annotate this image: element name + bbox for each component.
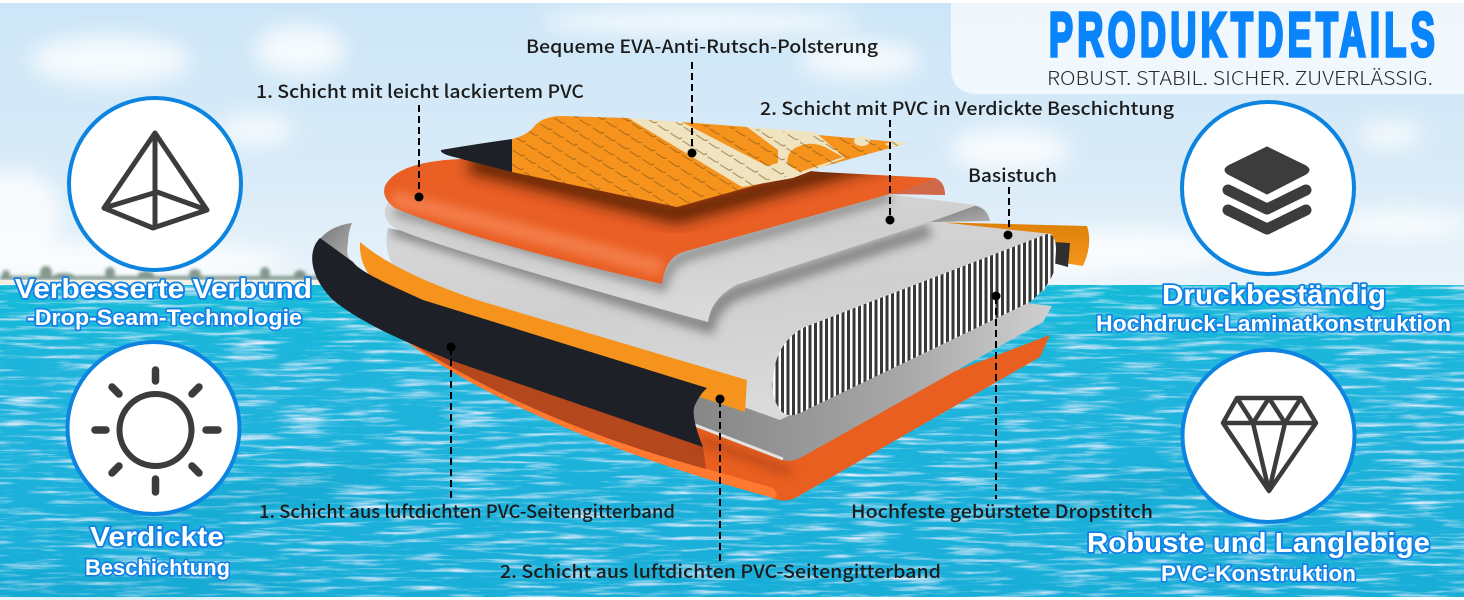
inner grey of black band	[319, 223, 353, 262]
leader: base cloth	[1004, 187, 1012, 240]
subheading: -Drop-Seam-Technologie	[27, 305, 302, 330]
pad tread texture	[512, 116, 908, 207]
leader: side band 2	[716, 394, 724, 562]
leader: layer 2 PVC	[886, 120, 894, 224]
pad orange patches	[682, 122, 843, 172]
label: layer 1 PVC: 1. Schicht mit leicht lackiertem PVC	[256, 78, 584, 104]
board cross-section illustration	[312, 116, 1089, 500]
pad orange	[512, 116, 908, 207]
dropstitch stripes	[773, 234, 1056, 415]
feature: thick coating	[68, 342, 240, 580]
sand strip	[0, 280, 320, 284]
label: EVA padding: Bequeme EVA-Anti-Rutsch-Polsterung	[526, 33, 879, 59]
icon: pyramid	[69, 98, 241, 270]
label: base cloth: Basistuch	[968, 162, 1057, 188]
black valve block	[1053, 242, 1070, 267]
water ripples	[0, 285, 1464, 597]
EVA pad	[441, 116, 908, 207]
top orange layer	[384, 150, 945, 284]
subheading: Beschichtung	[85, 555, 230, 580]
leader: dropstitch	[992, 292, 1000, 499]
header panel	[951, 3, 1464, 94]
darker wave swaths	[0, 449, 1330, 595]
title: PRODUKTDETAILS	[1049, 0, 1435, 69]
leader: EVA padding	[688, 62, 696, 158]
lower grey layer	[690, 300, 1052, 461]
heading: Druckbeständig	[1162, 279, 1386, 310]
tree line on the horizon	[0, 266, 320, 280]
heading: Verdickte	[90, 521, 224, 552]
feature: seam technology	[15, 98, 312, 330]
bottom orange layer	[405, 335, 1050, 500]
clouds	[0, 10, 1464, 282]
icon: diamond	[1182, 350, 1354, 522]
upper silver sheet	[385, 193, 990, 322]
label: side band 2: 2. Schicht aus luftdichten PVC-Seitengitterband	[500, 558, 941, 584]
heading: Robuste und Langlebige	[1087, 527, 1430, 558]
curled sheet edge	[930, 206, 990, 222]
subtitle: ROBUST. STABIL. SICHER. ZUVERLÄSSIG.	[1047, 64, 1433, 91]
pad cream patches	[628, 118, 908, 187]
feature: durable construction	[1087, 350, 1430, 586]
icon: sun	[68, 342, 240, 514]
pad black nose	[441, 139, 512, 172]
leader: side band 1	[446, 342, 456, 498]
subheading: Hochdruck-Laminatkonstruktion	[1096, 311, 1451, 336]
main silver body	[386, 221, 1052, 420]
base cloth	[930, 222, 1089, 266]
label: side band 1: 1. Schicht aus luftdichten PVC-Seitengitterband	[259, 498, 675, 524]
subheading: PVC-Konstruktion	[1161, 561, 1356, 586]
sky	[0, 3, 1464, 288]
sea	[0, 285, 1464, 597]
shadow on upper sheet	[395, 196, 890, 286]
shadow on main body	[392, 228, 930, 326]
orange band	[360, 242, 747, 412]
feature: pressure resistant	[1096, 102, 1451, 336]
leader: layer 1 PVC	[414, 105, 424, 202]
black band	[312, 238, 707, 447]
heading: Verbesserte Verbund	[15, 273, 312, 304]
label: dropstitch: Hochfeste gebürstete Dropstitch	[851, 498, 1153, 524]
label: layer 2 PVC: 2. Schicht mit PVC in Verdickte Beschichtung	[760, 95, 1175, 121]
icon: layers	[1182, 102, 1354, 274]
